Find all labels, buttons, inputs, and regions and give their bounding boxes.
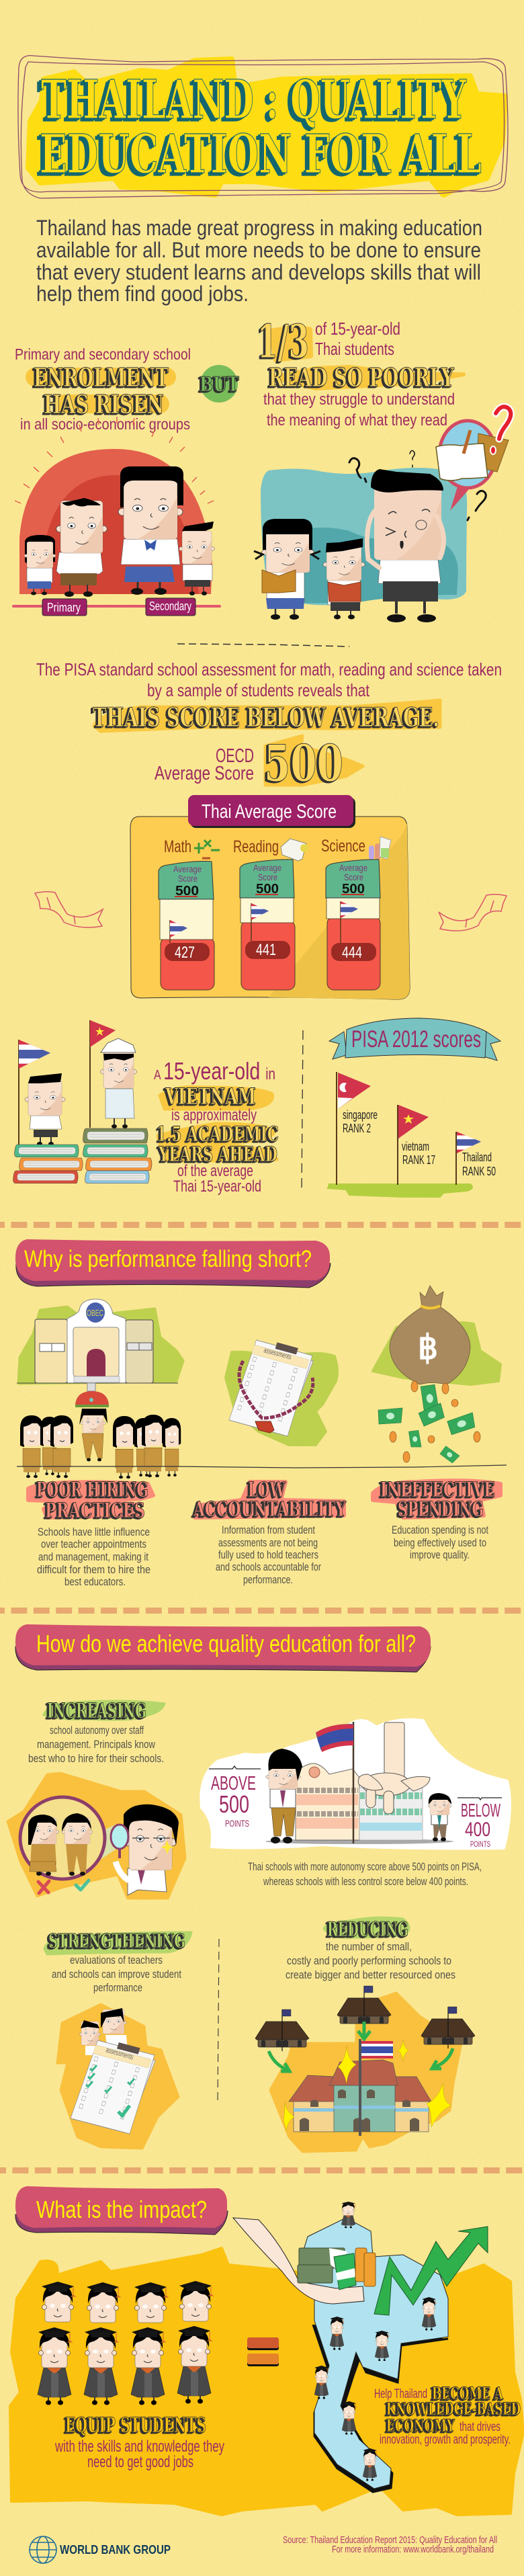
icon: cross <box>38 1881 49 1893</box>
intro text: that every student learns and develops skills that will <box>36 260 481 284</box>
text: and schools can improve student <box>52 1968 181 1981</box>
clipboard <box>229 1336 316 1437</box>
panel: poor hiring: best educators. <box>64 1575 126 1588</box>
bar: science 444: Score <box>344 872 363 882</box>
divider: section dashes <box>0 2167 524 2173</box>
bar: reading 441: 441 <box>256 941 276 959</box>
panel label: Thai Average Score <box>202 801 337 823</box>
panel: increasing autonomy <box>7 1699 185 1899</box>
low accountability text <box>193 1478 347 1522</box>
students behind clipboard <box>79 2008 128 2055</box>
panel: low accountability: assessments are not being <box>218 1536 318 1549</box>
illustration: teal blob <box>261 468 467 605</box>
reading text: that they struggle to understand <box>263 390 455 409</box>
bar: science 444: 500 <box>342 882 365 897</box>
left book stack <box>13 1145 83 1183</box>
PISA text: by a sample of students reveals that <box>147 680 370 700</box>
panel: poor hiring <box>17 1299 507 1588</box>
panel: low accountability <box>193 1336 347 1586</box>
bar: math 427 <box>159 862 214 990</box>
knowledge economy text: ECONOMY <box>386 2416 455 2436</box>
Vietnam student on books <box>90 1020 137 1128</box>
equip students text: EQUIP STUDENTS <box>65 2413 206 2438</box>
logo: World Bank Group <box>30 2536 171 2563</box>
text: performance <box>93 1981 142 1994</box>
reading text: READ SO POORLY <box>269 362 455 392</box>
reading text: the meaning of what they read <box>267 411 447 429</box>
OECD average score: 500 <box>264 734 343 793</box>
heading: How do we achieve quality education for all? <box>15 1624 431 1672</box>
banner <box>329 1018 500 1061</box>
column headers: Reading <box>233 837 279 856</box>
panel: Thailand map <box>233 2202 521 2492</box>
low accountability highlight <box>195 1482 344 1518</box>
text: management. Principals know <box>37 1738 156 1751</box>
graduates row 2 <box>38 2326 212 2405</box>
map shadow <box>313 2325 448 2492</box>
equip students text: with the skills and knowledge they <box>54 2438 224 2456</box>
flag: Thailand: RANK 50 <box>462 1165 496 1178</box>
ground line <box>17 1465 507 1468</box>
text: STRENGTHENING <box>48 1929 185 1952</box>
poor hiring text <box>36 1478 148 1523</box>
below 400 label: 400 <box>465 1819 490 1841</box>
icon: equals sign <box>247 2337 279 2366</box>
panel: Thai average score <box>130 795 410 999</box>
orange blob <box>7 1773 185 1899</box>
panel: poor hiring: over teacher appointments <box>41 1538 146 1550</box>
above 500 label: 500 <box>219 1790 249 1818</box>
giant hand <box>358 1722 430 1814</box>
flag: Vietnam: vietnam <box>402 1140 429 1153</box>
below 400 label: POINTS <box>470 1839 490 1849</box>
divider: short dashed <box>177 644 349 647</box>
divider: vertical dashed <box>302 1030 303 1191</box>
tag: Secondary <box>146 598 195 616</box>
reading text <box>257 315 455 429</box>
icon: math <box>194 840 220 858</box>
bar: science 444 <box>326 860 380 990</box>
heading: How do we achieve quality education for all?: How do we achieve quality education for all? <box>36 1630 416 1657</box>
icon: question marks <box>349 451 486 520</box>
poor hiring text: PRACTICES <box>45 1499 145 1523</box>
map of Thailand <box>299 2218 448 2489</box>
Vietnam text: 1.5 ACADEMIC <box>157 1122 279 1147</box>
intro text <box>36 216 482 306</box>
teachers group left <box>20 1415 73 1478</box>
principal with magnifier <box>111 1804 179 1895</box>
graduates row 1 <box>42 2281 213 2323</box>
Vietnam highlights <box>158 1087 277 1161</box>
sparkles <box>283 2040 451 2130</box>
small school right <box>421 2007 475 2048</box>
level legend line <box>13 605 220 608</box>
small school top <box>337 1986 391 2028</box>
panel: reading <box>254 315 511 622</box>
panel: strengthening <box>44 1929 191 2149</box>
title panel <box>18 56 508 198</box>
student: tall girl <box>118 466 183 595</box>
Vietnam text: of the average <box>177 1162 253 1180</box>
Vietnam text <box>154 1057 279 1196</box>
ineffective text <box>380 1478 495 1522</box>
icon: BUT circle: BUT <box>200 373 240 397</box>
arrows <box>269 2022 453 2071</box>
bar: math 427: Average <box>173 864 202 874</box>
knowledge economy text <box>374 2384 521 2447</box>
above 500 label: POINTS <box>225 1818 249 1829</box>
short school <box>359 1788 423 1840</box>
equip students text: need to get good jobs <box>87 2453 193 2471</box>
panel: PISA 2012 scores <box>328 1018 500 1197</box>
green blob <box>19 1307 183 1383</box>
Vietnam text: is approximately <box>171 1106 257 1124</box>
panel: reducing <box>255 1917 475 2152</box>
enrolment text: HAS RISEN <box>44 389 164 419</box>
green blob <box>373 1323 500 1384</box>
text: the number of small, <box>326 1940 412 1953</box>
low accountability text: LOW <box>248 1478 286 1502</box>
white blob <box>201 1720 510 1848</box>
flag: Vietnam: RANK 17 <box>402 1153 435 1167</box>
big school <box>289 2060 431 2132</box>
panel: poor hiring: difficult for them to hire the <box>37 1563 150 1576</box>
panel: low accountability: performance. <box>243 1573 293 1586</box>
panel: ineffective spending: improve quality. <box>410 1548 470 1561</box>
growth arrow <box>374 2227 488 2315</box>
ribbon right <box>439 895 507 931</box>
bar: science 444: Average <box>339 862 367 873</box>
icon: flasks <box>369 837 391 860</box>
title highlight blob <box>28 59 505 195</box>
flag: Vietnam <box>398 1105 435 1185</box>
Thai student on books <box>19 1040 65 1146</box>
text <box>48 1929 185 1994</box>
ribbon left <box>35 892 103 927</box>
bar: math 427: 500 <box>175 884 199 899</box>
proud principal <box>266 1749 302 1843</box>
OECD average score <box>155 734 363 793</box>
flag <box>316 1722 353 1843</box>
text: INCREASING <box>47 1699 146 1723</box>
flag: Singapore: singapore <box>343 1108 378 1122</box>
text: costly and poorly performing schools to <box>287 1954 451 1967</box>
highlight <box>44 1701 165 1720</box>
column headers <box>164 837 365 856</box>
above 500 label: ABOVE <box>211 1773 256 1794</box>
reading text: 1/3 <box>257 315 309 369</box>
panel body <box>130 817 410 999</box>
intro text: help them find good jobs. <box>36 282 249 306</box>
reading text: Thai students <box>315 339 394 359</box>
enrolment text: Primary and secondary school <box>15 345 191 363</box>
low accountability text: ACCOUNTABILITY <box>193 1497 347 1522</box>
enrolment text: ENROLMENT <box>34 362 169 392</box>
assessments label: assessments <box>263 1346 292 1362</box>
poor hiring highlight <box>28 1482 153 1518</box>
title frame <box>18 56 508 198</box>
large yellow impact blob <box>10 2248 523 2515</box>
student: boy right <box>179 522 214 595</box>
right book stack <box>83 1128 152 1183</box>
panel: low accountability: and schools accountable for <box>216 1561 321 1573</box>
clipboard with checks <box>71 2036 158 2134</box>
green blob <box>226 1352 337 1445</box>
text: evaluations of teachers <box>70 1954 163 1966</box>
divider: vertical dashed <box>218 1939 219 2102</box>
bar: math 427: 427 <box>175 944 195 962</box>
bar: reading 441: 500 <box>256 882 279 897</box>
OBEC building <box>17 1299 178 1383</box>
bureaucrat with helmet <box>75 1383 109 1461</box>
student: small girl <box>24 535 56 595</box>
text: REDUCING <box>327 1918 408 1942</box>
tag: Primary <box>42 599 87 616</box>
reading highlights <box>270 327 464 388</box>
candidate: woman <box>28 1815 59 1876</box>
heading: What is the impact? <box>15 2186 228 2235</box>
text <box>286 1918 455 1981</box>
above 500 label <box>209 1766 261 1829</box>
panel: ineffective spending: being effectively used to <box>394 1536 486 1549</box>
small school left <box>255 2009 309 2051</box>
reading text: of 15-year-old <box>315 319 400 339</box>
highlight <box>44 1932 191 1954</box>
OBEC building: OBEC <box>87 1308 103 1318</box>
clipboard with checks: assessments <box>105 2046 134 2062</box>
Vietnam text: YEARS AHEAD <box>158 1142 277 1167</box>
panel: poor hiring: Schools have little influence <box>38 1526 150 1538</box>
icon: BUT circle <box>200 365 240 403</box>
OECD average score: Average Score <box>155 763 254 784</box>
enrolment highlight <box>35 377 167 404</box>
bar: reading 441 <box>240 860 295 990</box>
flag: Thailand: Thailand <box>462 1151 492 1164</box>
student: small boy <box>56 498 107 597</box>
student: confused tall boy <box>367 469 443 622</box>
candidate: man <box>62 1813 93 1876</box>
column headers: Science <box>321 837 365 856</box>
small principal <box>428 1793 451 1841</box>
panel: graduates <box>38 2281 224 2471</box>
text: create bigger and better resourced ones <box>286 1968 455 1981</box>
falling money <box>378 1381 480 1464</box>
thought bubble <box>436 407 511 511</box>
panel: ineffective spending <box>373 1286 500 1561</box>
bar: math 427: Score <box>178 873 198 884</box>
ineffective highlight <box>373 1481 500 1518</box>
panel: poor hiring: and management, making it <box>38 1550 148 1563</box>
money bag: ฿ <box>418 1329 438 1366</box>
hand with money <box>233 2218 376 2304</box>
logo: World Bank Group: WORLD BANK GROUP <box>60 2543 171 2557</box>
equip students text <box>54 2413 224 2471</box>
student: reading boy <box>323 538 365 620</box>
knowledge economy text: Help Thailand <box>374 2387 427 2401</box>
knowledge economy text: that drives <box>460 2420 500 2434</box>
panel label <box>188 795 355 828</box>
divider: section dashes <box>0 1608 524 1614</box>
money bag <box>390 1286 470 1384</box>
source note <box>283 2534 497 2555</box>
tall school <box>296 1763 359 1840</box>
Vietnam text: A 15-year-old in <box>154 1057 275 1085</box>
bar: reading 441: Score <box>258 872 277 882</box>
icon: book <box>281 839 308 861</box>
title text <box>40 68 482 185</box>
chain and lock <box>239 1361 313 1433</box>
graduates on the map <box>314 2202 436 2481</box>
poor hiring text: POOR HIRING <box>36 1478 148 1502</box>
icon: check <box>76 1880 89 1890</box>
panel: ineffective spending: Education spending is not <box>392 1524 488 1536</box>
heading: Why is performance falling short? <box>15 1239 331 1288</box>
Vietnam text: Thai 15-year-old <box>173 1177 261 1196</box>
caption <box>248 1860 482 1888</box>
illustration: red dome with rays <box>15 417 214 594</box>
flag: Singapore <box>337 1072 378 1185</box>
divider: section dashes <box>0 1222 524 1228</box>
ground shadow <box>265 1839 453 1844</box>
student: reading girl <box>254 519 320 620</box>
tag: Secondary: Secondary <box>149 599 191 613</box>
text: best who to hire for their schools. <box>28 1752 164 1765</box>
highlight <box>324 1917 409 1938</box>
below 400 label <box>457 1798 502 1849</box>
panel: enrolment <box>13 345 220 616</box>
enrolment text: in all socio-economic groups <box>20 415 190 433</box>
column headers: Math <box>164 837 191 856</box>
tag: Primary: Primary <box>47 601 81 614</box>
orange blob <box>270 1993 462 2152</box>
teachers group right <box>113 1415 181 1479</box>
heading: What is the impact?: What is the impact? <box>36 2196 207 2223</box>
enrolment text <box>15 345 191 433</box>
panel: autonomy scores <box>201 1720 510 1888</box>
flag: Singapore: RANK 2 <box>343 1122 371 1135</box>
panel: low accountability: Information from student <box>222 1524 315 1536</box>
icon: globe <box>30 2536 56 2563</box>
big school flag <box>360 2039 393 2136</box>
magnifying lens with candidates <box>20 1797 116 1879</box>
PISA text <box>36 659 502 700</box>
panel: low accountability: fully used to hold teachers <box>218 1548 318 1561</box>
panel: Vietnam comparison <box>13 1020 279 1196</box>
grass <box>328 1184 472 1197</box>
text: school autonomy over staff <box>50 1724 144 1737</box>
orange blob <box>57 2004 179 2149</box>
bar: science 444: 444 <box>342 944 362 962</box>
heading: Why is performance falling short?: Why is performance falling short? <box>24 1246 312 1272</box>
text <box>28 1699 164 1765</box>
Vietnam text: VIETNAM <box>165 1083 256 1110</box>
bar: reading 441: Average <box>253 862 281 873</box>
flag: Thailand <box>456 1132 496 1185</box>
OECD average score: OECD <box>216 745 254 767</box>
